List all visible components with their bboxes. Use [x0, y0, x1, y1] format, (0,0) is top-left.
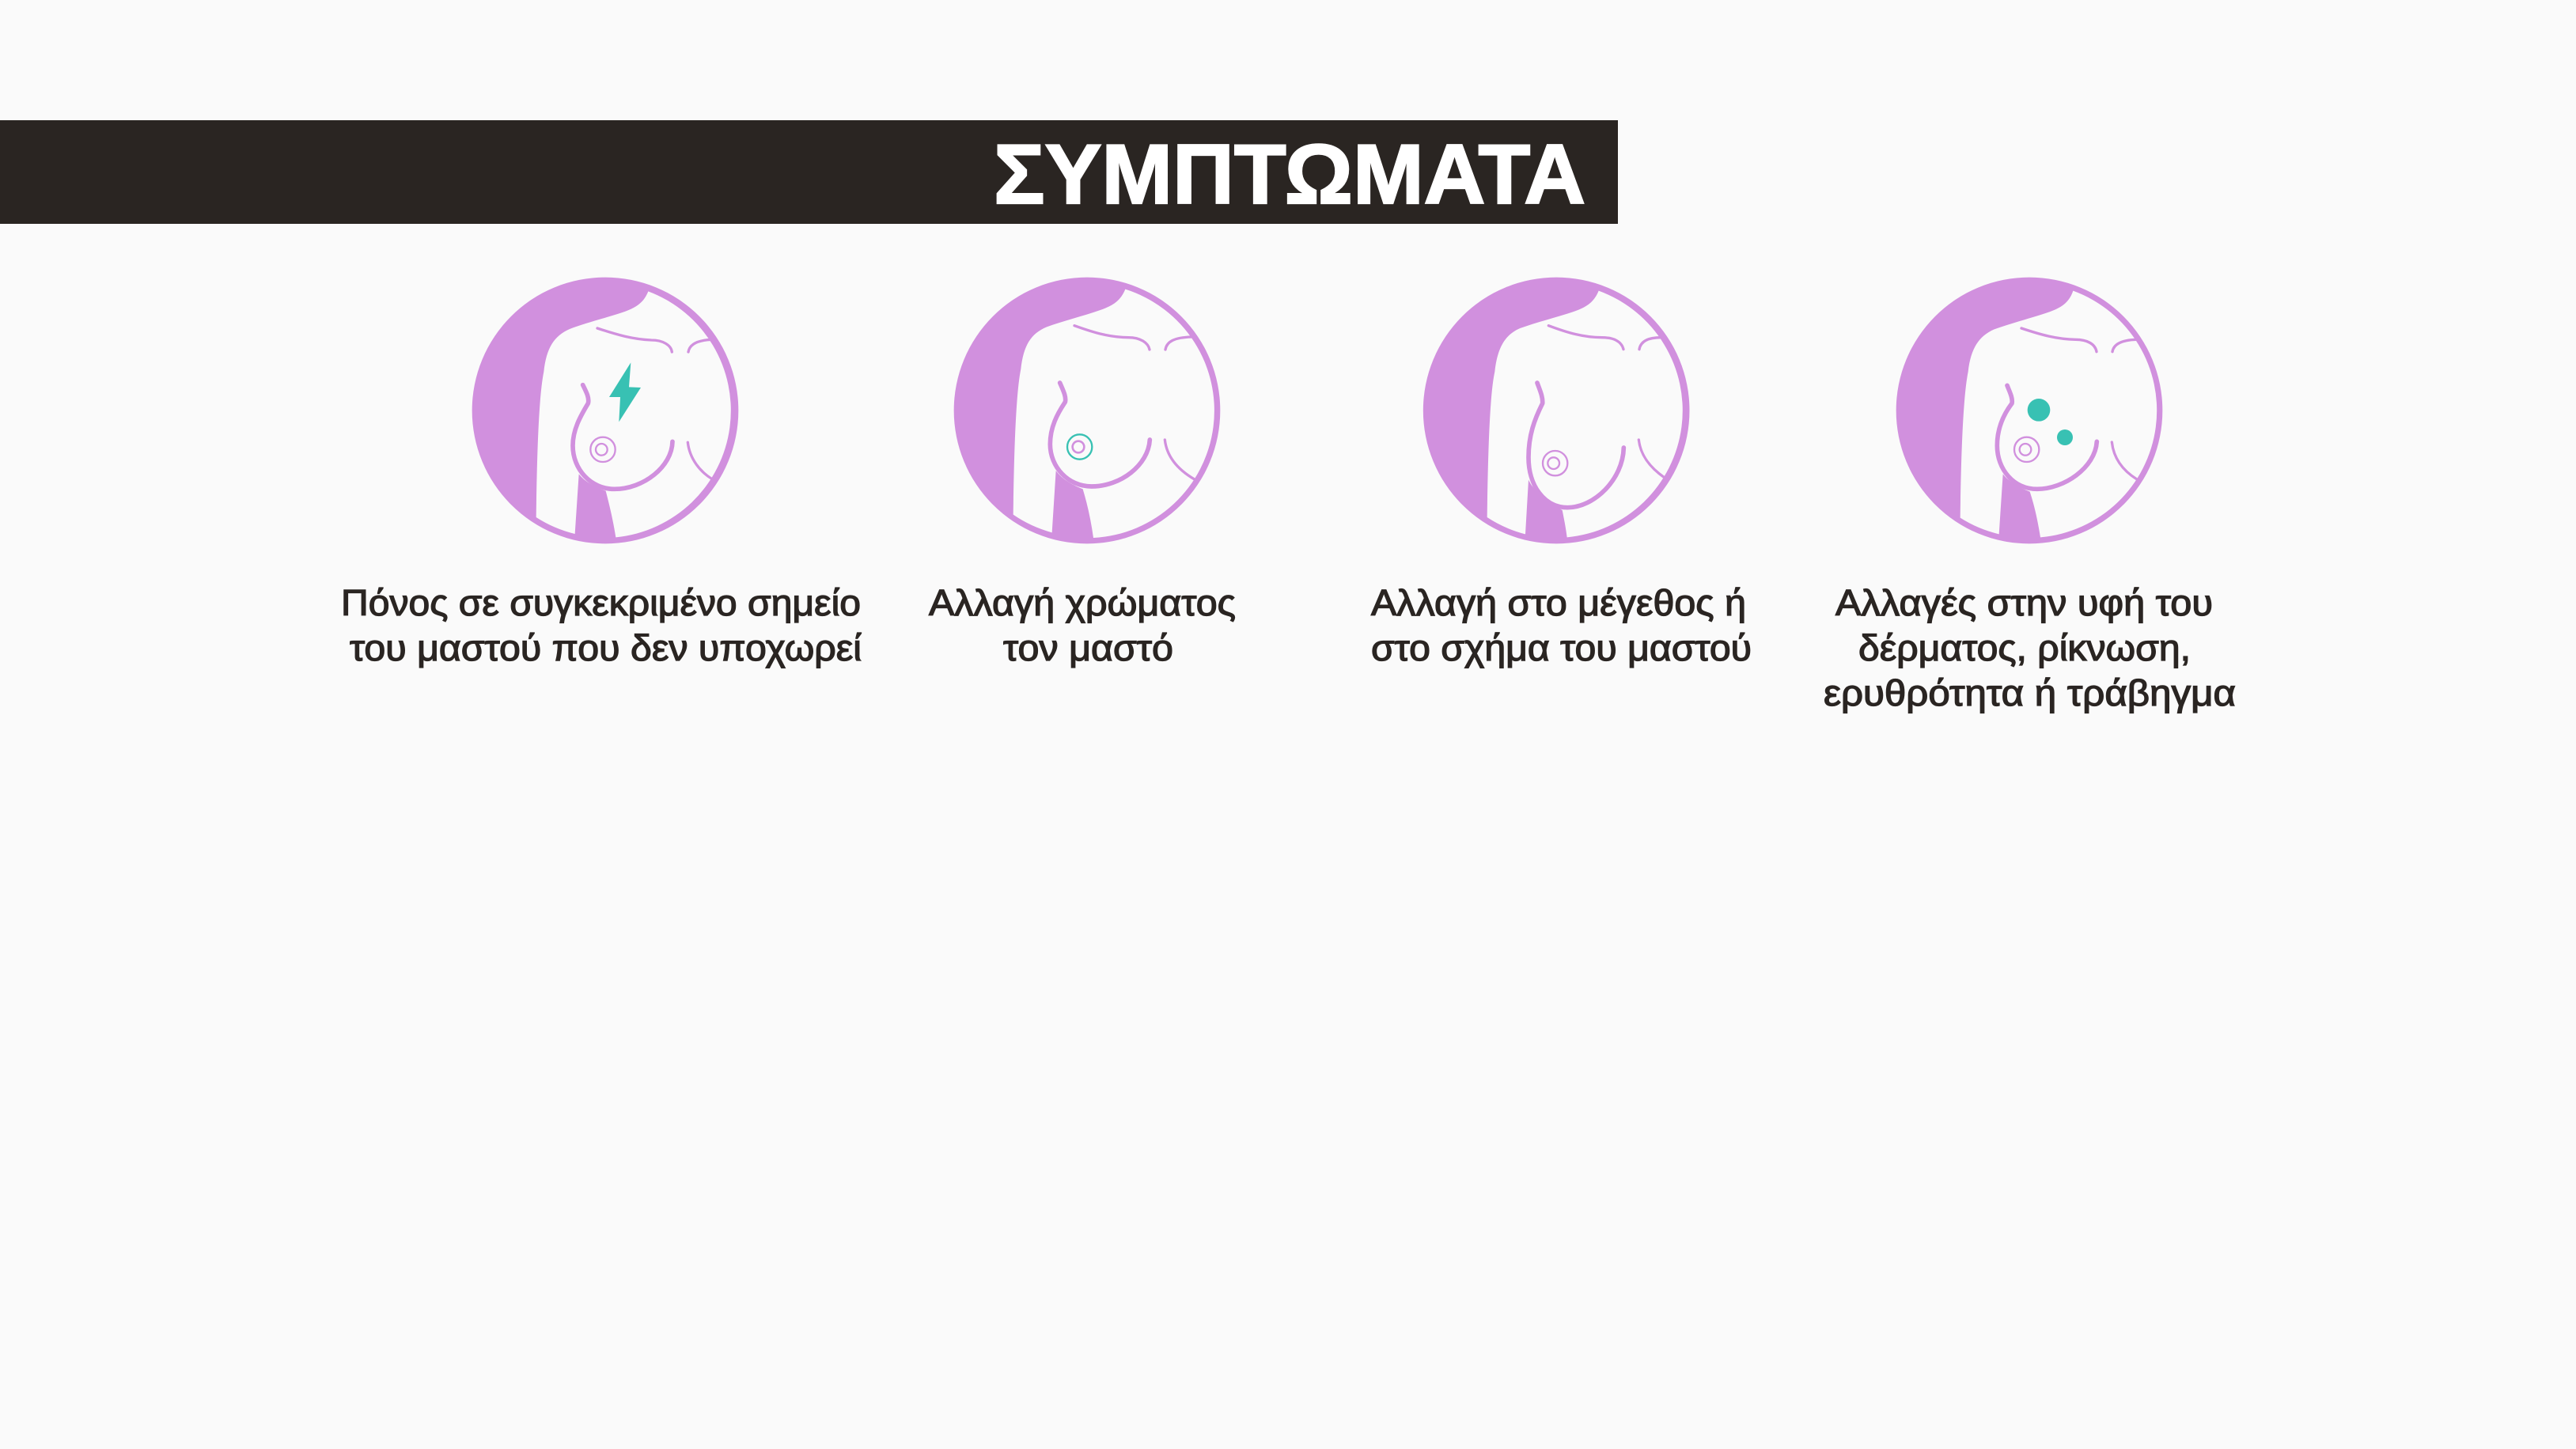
- caption: pain: του μαστού που δεν υποχωρεί: [350, 627, 862, 668]
- header banner: [0, 120, 1618, 224]
- icon: size or shape change: [1423, 278, 1689, 543]
- title: ΣΥΜΠΤΩΜΑΤΑ: [994, 127, 1585, 221]
- lightning bolt: [609, 362, 641, 422]
- icon: colour change with teal areola: [954, 278, 1220, 543]
- teal spots: [2028, 399, 2073, 445]
- caption: skin texture change: [1824, 582, 2236, 713]
- caption: colour change: [929, 582, 1236, 668]
- teal areola ring: [1067, 434, 1092, 460]
- caption: size or shape change: [1371, 582, 1752, 668]
- caption: colour change: Αλλαγή χρώματος: [929, 582, 1236, 623]
- caption: skin texture change: ερυθρότητα ή τράβηγμα: [1824, 672, 2236, 713]
- caption: size or shape change: Αλλαγή στο μέγεθος ή: [1371, 582, 1746, 623]
- caption: pain: [341, 582, 862, 668]
- caption: skin texture change: Αλλαγές στην υφή του: [1835, 582, 2213, 623]
- caption: skin texture change: δέρματος, ρίκνωση,: [1858, 627, 2191, 668]
- icon: skin texture change with teal spots: [1896, 278, 2162, 543]
- caption: pain: Πόνος σε συγκεκριμένο σημείο: [341, 582, 861, 623]
- caption: colour change: τον μαστό: [1003, 627, 1173, 668]
- caption: size or shape change: στο σχήμα του μαστού: [1371, 627, 1752, 668]
- icon: pain with lightning bolt: [472, 278, 738, 543]
